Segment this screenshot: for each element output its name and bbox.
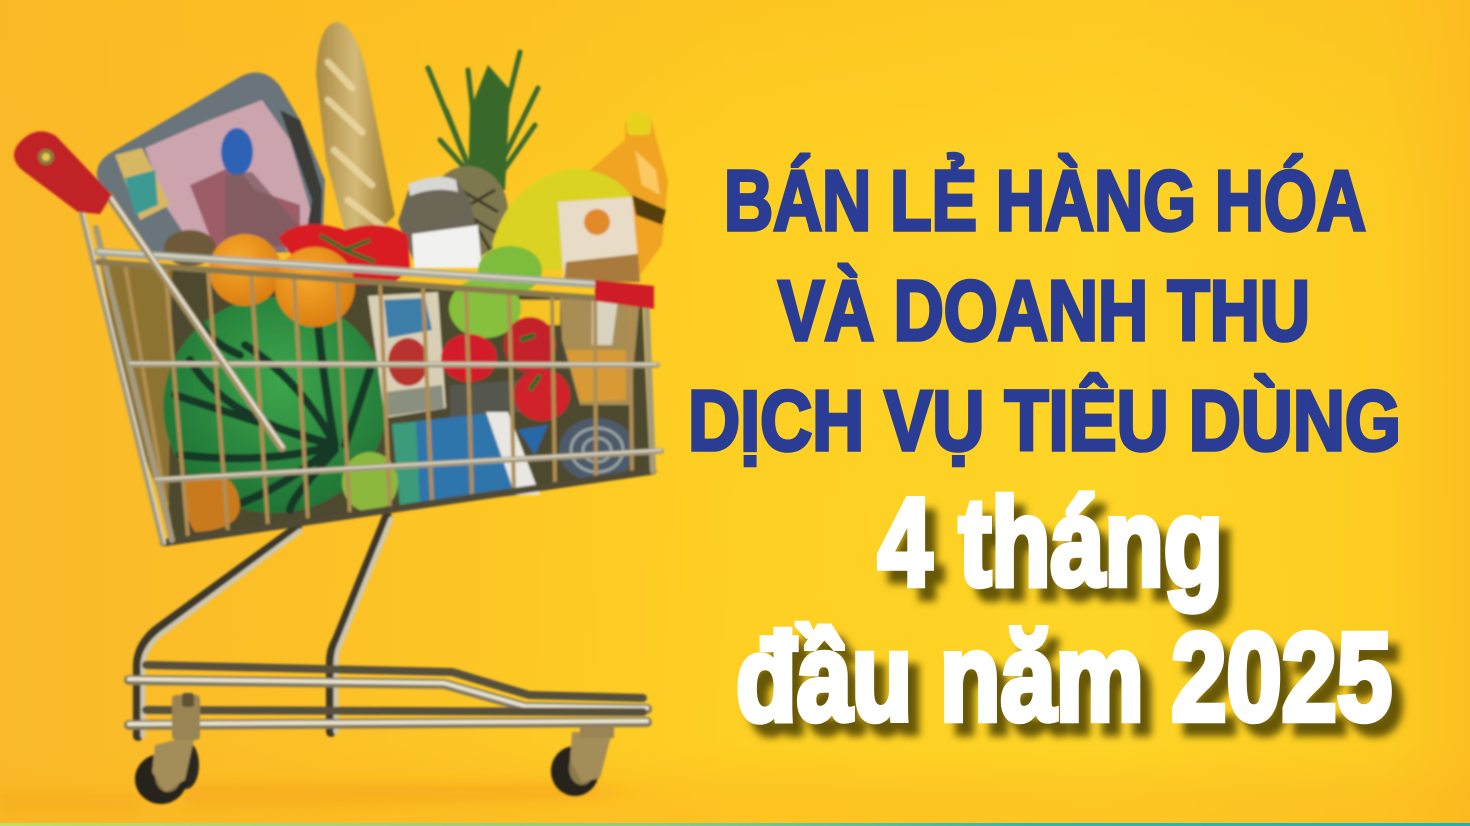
cart floor shadow (0, 784, 640, 808)
title: VÀ DOANH THU (778, 264, 1310, 359)
meat tray (97, 73, 325, 260)
bananas (492, 168, 632, 270)
watermelon (146, 279, 404, 531)
blue box (392, 412, 548, 506)
orange, bottom left (183, 474, 240, 532)
right wheel (551, 726, 614, 796)
red rail end cap (595, 280, 654, 309)
pineapple (428, 52, 538, 258)
carton (558, 197, 640, 405)
title (688, 153, 1401, 469)
tin can (559, 418, 635, 482)
bottom accent strip (0, 823, 1470, 826)
milk bottle (398, 177, 482, 268)
left wheel (135, 693, 200, 804)
subtitle: time period: 4 tháng (878, 474, 1223, 612)
small bottles and can (115, 128, 298, 266)
green apple, bottom (342, 452, 398, 512)
cart chassis and wheels (129, 517, 647, 804)
oranges (209, 234, 355, 327)
basket wire frame (82, 193, 661, 543)
red tomatoes, top (278, 224, 410, 285)
juice bottle (590, 113, 668, 275)
baguette (316, 22, 395, 240)
subtitle: time period (736, 474, 1392, 747)
red cart handle (14, 131, 112, 214)
illustration: shopping cart full of groceries (14, 22, 668, 804)
red tomatoes, middle (441, 317, 570, 421)
basket contents backing (100, 262, 650, 540)
beer can (368, 292, 446, 418)
green apples (449, 246, 542, 338)
